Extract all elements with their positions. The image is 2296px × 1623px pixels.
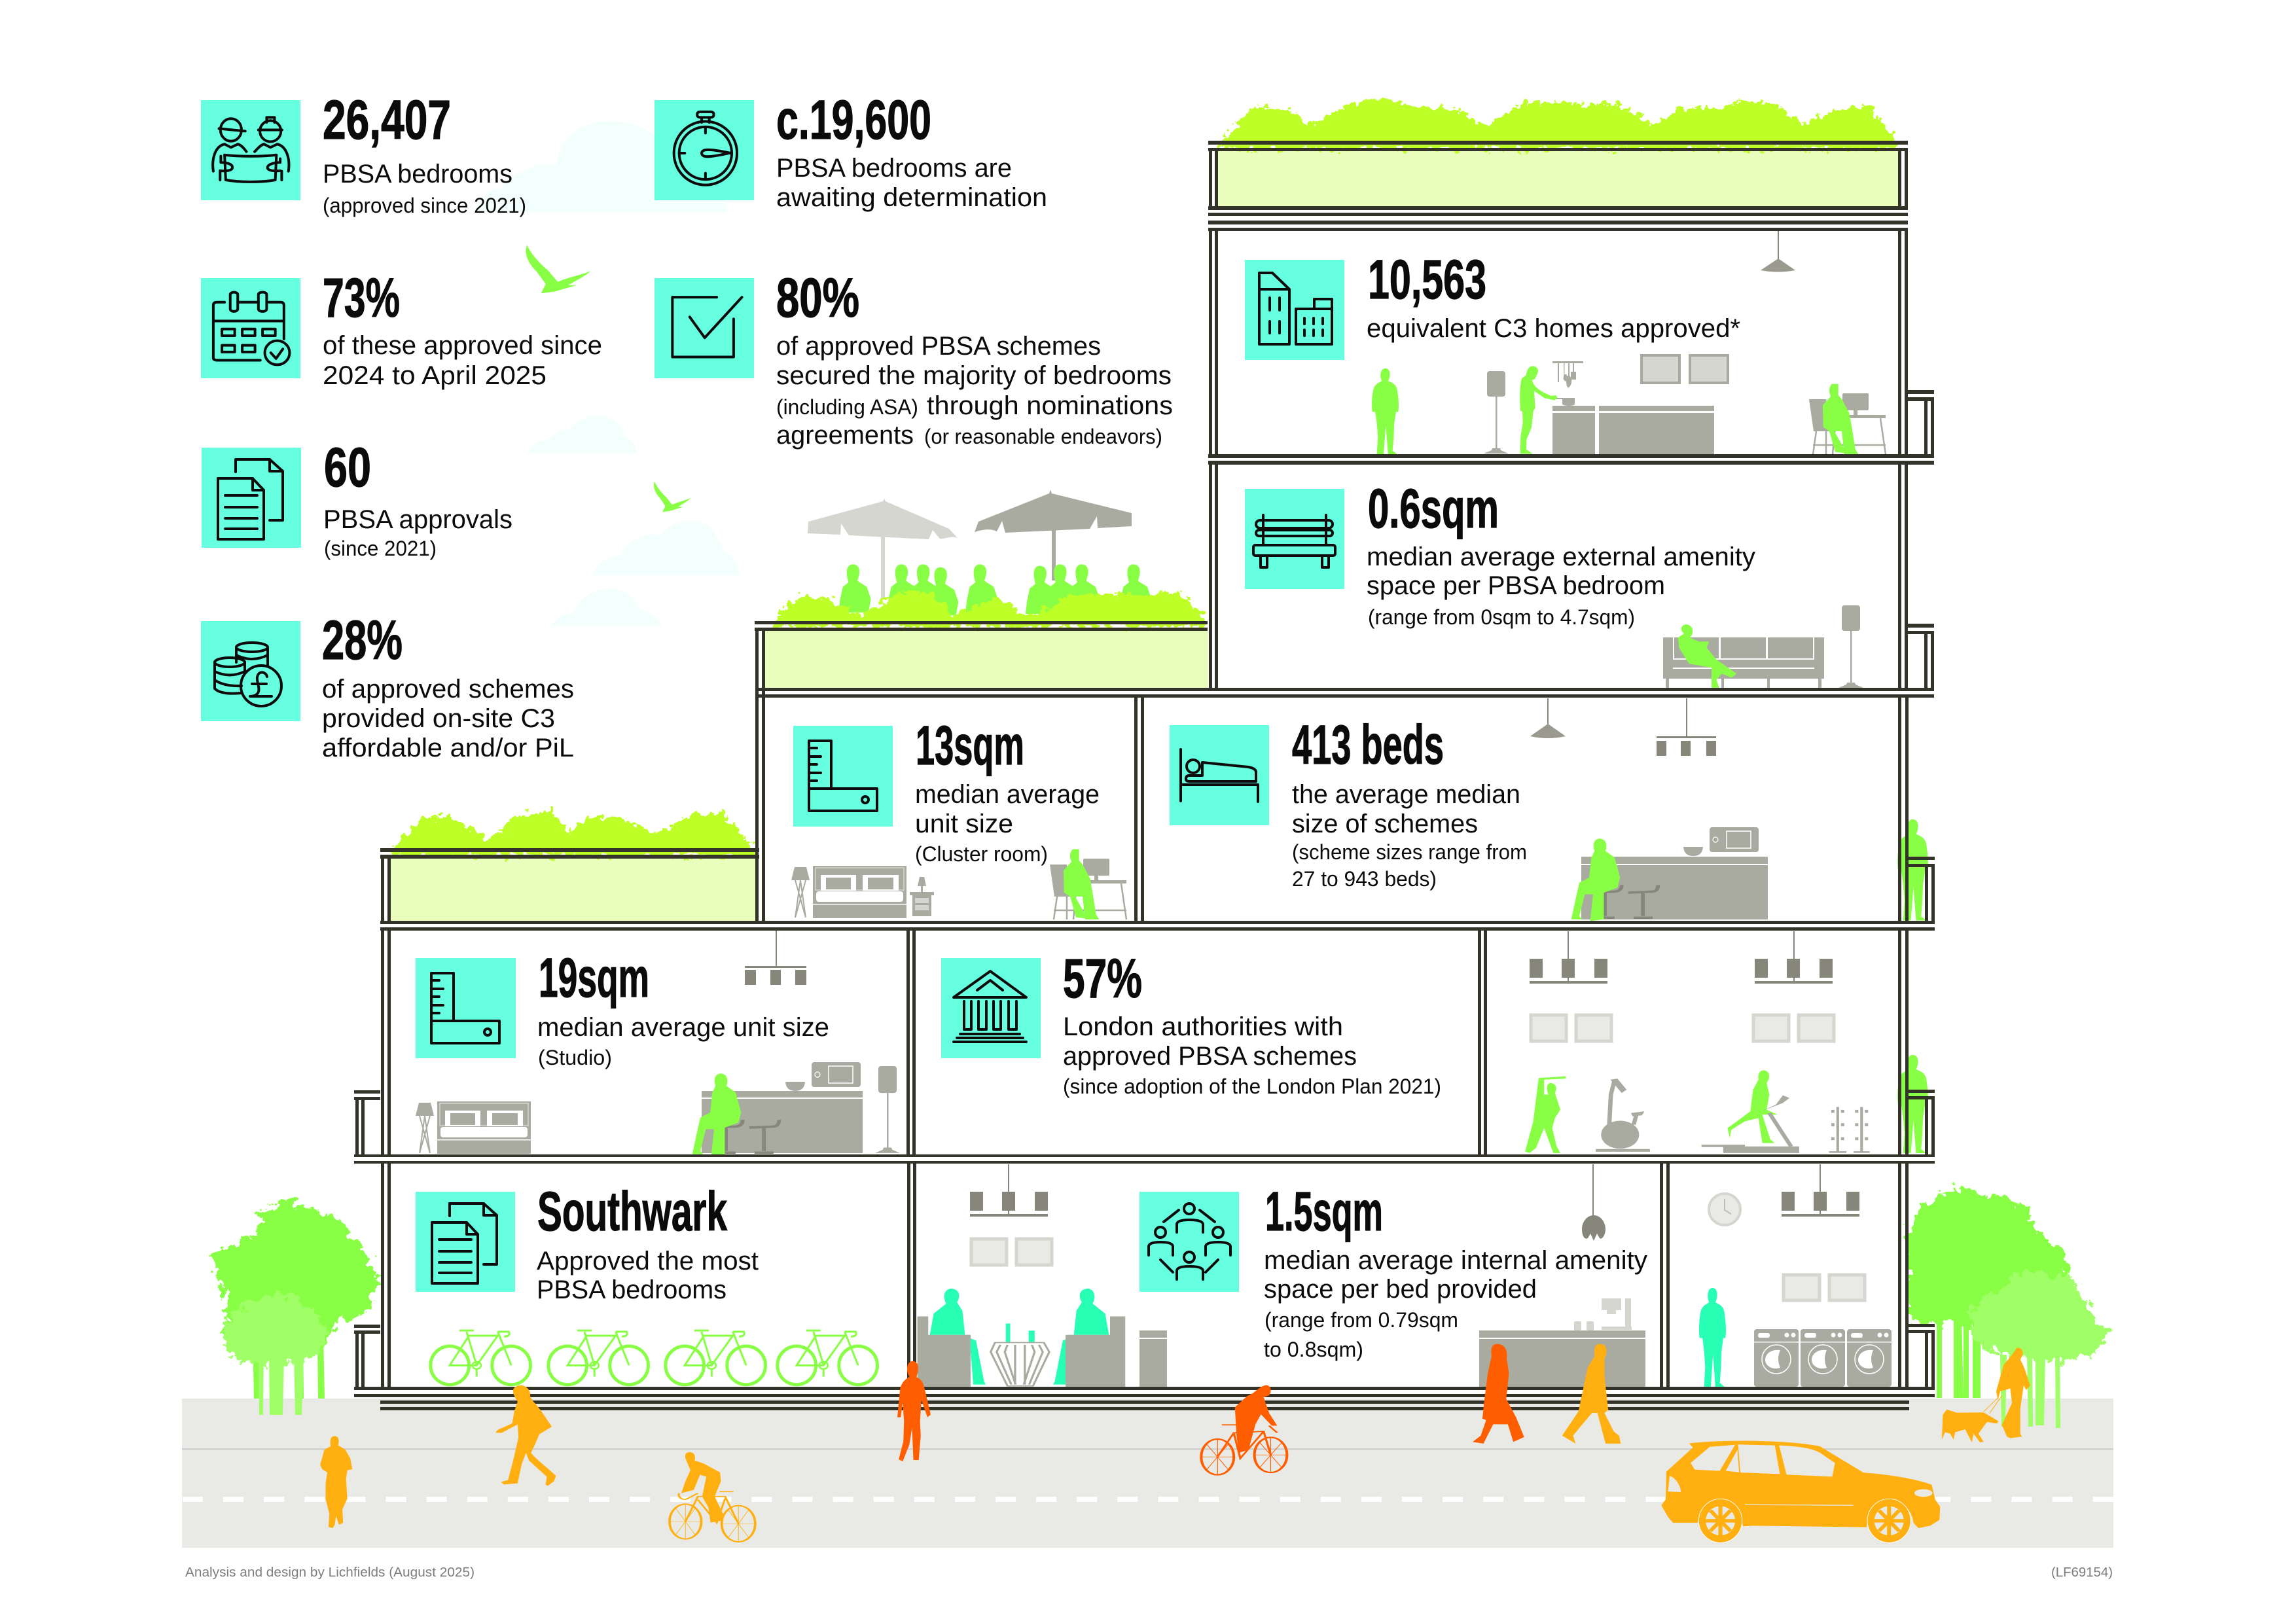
description: approved PBSA schemes [1063, 1042, 1357, 1071]
pedestrian: person walking dog [1942, 1347, 2030, 1442]
note: (scheme sizes range from [1292, 840, 1527, 864]
icon: buildings [1245, 260, 1344, 360]
note [1292, 840, 1527, 891]
icon: large green bird [526, 245, 591, 293]
floor 3 left furniture [791, 849, 1126, 919]
note: (range from 0.79sqm [1265, 1308, 1458, 1332]
stat: 28% [201, 609, 574, 762]
description: (or reasonable endeavors) [924, 425, 1162, 448]
roof planter pale panels [391, 151, 1898, 921]
note [1264, 1308, 1458, 1361]
description [322, 675, 574, 762]
figure: Southwark [537, 1181, 727, 1242]
figure: 13sqm [916, 715, 1024, 776]
cabinet [1139, 1330, 1167, 1387]
floor 4 left furniture [416, 931, 900, 1156]
kitchen counter [702, 1091, 863, 1153]
kitchen counter [1552, 361, 1714, 454]
description [323, 331, 602, 390]
floor 3 right furniture [1530, 698, 1768, 921]
stat: 57% [941, 948, 1441, 1098]
clouds [476, 121, 740, 626]
icon: stopwatch [655, 100, 754, 200]
note: (Cluster room) [915, 842, 1048, 866]
stat: 26,407 [201, 89, 526, 217]
person on treadmill [1702, 1070, 1799, 1153]
description: of these approved since [323, 331, 602, 360]
description [776, 154, 1047, 212]
pedestrian: orange woman [1473, 1344, 1524, 1444]
reference code: (LF69154) [2051, 1565, 2113, 1580]
cyclist: amber [670, 1452, 755, 1542]
exercise bike [1596, 1079, 1650, 1150]
figure: 0.6sqm [1368, 478, 1499, 539]
pendant lamp [1530, 698, 1566, 738]
icon: set square [793, 726, 893, 827]
seated person with stools [1571, 838, 1658, 921]
description: 2024 to April 2025 [323, 361, 547, 390]
figure: 28% [322, 609, 403, 671]
icon: documents [202, 448, 301, 548]
description: space per PBSA bedroom [1367, 571, 1665, 600]
description: PBSA bedrooms [537, 1275, 726, 1304]
bed and lamp [791, 866, 906, 918]
cyclist: orange [1201, 1385, 1287, 1475]
description [915, 780, 1100, 838]
trees: left group [213, 1200, 378, 1415]
dumbbell rack [1829, 1107, 1870, 1152]
description [1063, 1012, 1357, 1071]
person standing [1699, 1288, 1726, 1387]
description: London authorities with [1063, 1012, 1343, 1041]
icon: construction workers [201, 100, 300, 200]
description [1367, 543, 1755, 600]
icon: bed [1170, 725, 1269, 825]
figure: 73% [323, 267, 400, 329]
wall frames [1531, 1015, 1834, 1041]
chandelier [1657, 698, 1716, 756]
description: secured the majority of bedrooms [776, 361, 1172, 390]
pedestrian: amber man standing [320, 1436, 352, 1528]
icon: coins [201, 621, 300, 721]
wall frames [1641, 355, 1728, 383]
stat: 0.6sqm [1245, 478, 1755, 629]
stat: 413 beds [1170, 714, 1527, 891]
figure: 10,563 [1368, 249, 1486, 310]
wall frames [1784, 1275, 1865, 1300]
description: PBSA bedrooms [323, 160, 512, 188]
street background [182, 1399, 2113, 1548]
description: agreements [776, 421, 914, 450]
description [1264, 1246, 1647, 1304]
figure: 413 beds [1292, 714, 1444, 776]
description: provided on-site C3 [322, 704, 555, 733]
note: (since 2021) [324, 537, 437, 560]
terrace hedge [774, 591, 1207, 627]
figure: 26,407 [323, 89, 451, 151]
stat: 1.5sqm [1139, 1181, 1647, 1361]
wall clock [1709, 1194, 1740, 1225]
pedestrian: orange man [897, 1361, 931, 1461]
description: equivalent C3 homes approved* [1367, 314, 1740, 343]
chandelier [1782, 1164, 1859, 1217]
person cooking [1520, 366, 1558, 454]
figure: 60 [324, 437, 371, 498]
standing person [1372, 368, 1399, 454]
stat: Southwark [416, 1181, 759, 1304]
floor 4 right: gym [1525, 931, 1870, 1153]
armchairs and table [918, 1317, 1125, 1387]
stat: c.19,600 [655, 89, 1047, 212]
note: 27 to 943 beds) [1292, 867, 1437, 891]
description: median average unit size [537, 1013, 829, 1042]
pedestrian: amber woman [1562, 1344, 1621, 1444]
description: median average [915, 780, 1100, 809]
floor 2 sofa and lamp [1663, 605, 1863, 688]
credit: Analysis and design by Lichfields (August 2025) [185, 1565, 475, 1580]
wall frames [971, 1239, 1052, 1265]
icon: bench [1245, 489, 1344, 589]
coffee machine [1574, 1298, 1632, 1330]
note: to 0.8sqm) [1264, 1338, 1363, 1361]
description: PBSA approvals [323, 505, 512, 534]
kitchen counter [1581, 857, 1768, 919]
washing machines [1754, 1329, 1892, 1387]
person stretching [1525, 1077, 1566, 1153]
stat: 80% [655, 267, 1173, 450]
building structure [354, 141, 1935, 1410]
pedestrian: amber walker [495, 1385, 556, 1486]
floor 5 right: laundry [1699, 1164, 1892, 1387]
bedside table [910, 877, 934, 916]
icon: tick box [655, 278, 754, 378]
description: through nominations [927, 391, 1173, 420]
car [1661, 1441, 1940, 1543]
stat: 73% [201, 267, 602, 390]
seated person with stools [692, 1073, 779, 1156]
pendant lamp [1761, 231, 1795, 272]
figure: 80% [776, 267, 859, 329]
description [1292, 780, 1520, 838]
roof hedge: top [1221, 100, 1897, 149]
bowl and microwave [785, 1062, 861, 1091]
icon: calendar [201, 278, 300, 378]
note: (since adoption of the London Plan 2021) [1063, 1075, 1441, 1098]
figure: 1.5sqm [1265, 1181, 1383, 1242]
description: (including ASA) [776, 395, 918, 419]
chandelier [970, 1164, 1048, 1217]
description [537, 1247, 759, 1304]
description: of approved PBSA schemes [776, 332, 1101, 361]
white building masks [354, 1164, 1935, 1387]
low roof hedge [392, 812, 755, 856]
description: the average median [1292, 780, 1520, 809]
stat: 19sqm [416, 947, 829, 1069]
note: (range from 0sqm to 4.7sqm) [1368, 605, 1635, 629]
icon: documents [416, 1192, 515, 1292]
description: Approved the most [537, 1247, 759, 1275]
stat: 60 [202, 437, 512, 560]
chandeliers [1530, 931, 1833, 984]
person at desk [1050, 849, 1126, 919]
seated people [930, 1289, 1109, 1385]
trees: right group [1909, 1183, 2109, 1428]
figure: 57% [1063, 948, 1142, 1009]
chandelier [745, 931, 806, 985]
note: (approved since 2021) [323, 194, 526, 217]
icon: group of people [1139, 1192, 1239, 1292]
bed and lamp [416, 1101, 531, 1154]
description: space per bed provided [1264, 1275, 1537, 1304]
description: median average internal amenity [1264, 1246, 1647, 1275]
stat: 10,563 [1245, 249, 1740, 360]
figure: 19sqm [539, 947, 649, 1008]
icon: small green bird [654, 482, 691, 512]
floor 5 middle: lounge [918, 1164, 1645, 1387]
terrace: seated people [838, 564, 1151, 615]
description: awaiting determination [776, 183, 1047, 212]
note: (Studio) [538, 1046, 612, 1069]
floor 1 furniture and people [1372, 231, 1886, 454]
person at desk [1809, 384, 1886, 454]
icon: civic building [941, 958, 1041, 1058]
stat: 13sqm [793, 715, 1100, 866]
description [776, 332, 1173, 450]
description: affordable and/or PiL [322, 734, 574, 762]
description: PBSA bedrooms are [776, 154, 1012, 183]
description: median average external amenity [1367, 543, 1755, 571]
figure: c.19,600 [776, 89, 931, 151]
terrace: umbrellas [808, 490, 1132, 599]
balcony figures [1897, 819, 1928, 1153]
description: size of schemes [1292, 810, 1478, 838]
icon: set square [416, 958, 516, 1058]
floor 5 left: bicycles [431, 1330, 877, 1385]
sofa [1663, 637, 1824, 688]
floor lamp [1839, 605, 1863, 688]
bowl and microwave [1683, 827, 1759, 856]
description: unit size [915, 810, 1013, 838]
person on sofa [1678, 624, 1736, 688]
floor lamp [1484, 371, 1509, 454]
kitchen counter [1479, 1330, 1645, 1387]
floor lamp [875, 1066, 900, 1153]
pendant lamp [1582, 1164, 1605, 1241]
description: of approved schemes [322, 675, 574, 704]
